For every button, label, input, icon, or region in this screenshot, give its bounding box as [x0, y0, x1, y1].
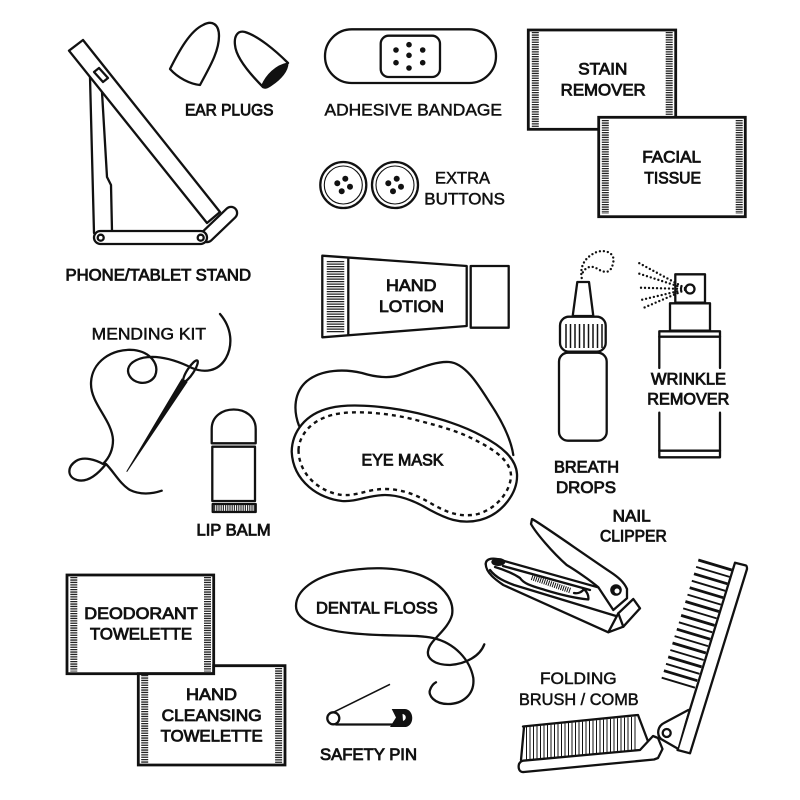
label: breath drops: BREATH	[554, 458, 619, 476]
icon: comb half	[519, 715, 662, 772]
icon: lip balm tube	[212, 410, 256, 512]
label: wrinkle remover: WRINKLE	[651, 370, 726, 388]
item: safety pin	[320, 684, 417, 764]
label: stain remover: STAIN	[578, 60, 627, 78]
icon: ear plug left	[170, 23, 219, 85]
label: nail clipper: CLIPPER	[600, 528, 667, 546]
label: breath drops: DROPS	[556, 479, 616, 497]
label: folding brush/comb: FOLDING	[540, 670, 617, 688]
icon: mask stitching	[298, 412, 511, 515]
icon: clipper	[486, 519, 640, 632]
label: facial tissue	[642, 149, 701, 187]
icon: brush half	[662, 560, 747, 753]
label: folding brush/comb: BRUSH / COMB	[519, 691, 639, 709]
label: deodorant towelette	[84, 605, 198, 644]
label: breath drops	[554, 458, 619, 497]
icon: bandage	[325, 29, 496, 83]
label: deodorant towelette: TOWELETTE	[90, 626, 192, 644]
label: extra buttons: BUTTONS	[424, 190, 505, 208]
item: stain remover packet	[528, 30, 676, 129]
item: mending kit	[69, 314, 230, 493]
icon: mask strap	[295, 362, 513, 455]
item: wrinkle remover	[638, 263, 729, 457]
item: phone/tablet stand	[66, 40, 251, 284]
label: ear plugs: EAR PLUGS	[185, 102, 274, 120]
icon: stand	[69, 40, 231, 244]
label: folding brush/comb	[519, 670, 639, 709]
label: wrinkle remover: REMOVER	[647, 390, 729, 408]
icon: hinge	[658, 710, 688, 748]
label: mending kit: MENDING KIT	[92, 325, 206, 343]
label: extra buttons	[424, 169, 505, 208]
item: deodorant towelette packet	[67, 575, 214, 674]
label: stain remover	[561, 60, 646, 99]
label: facial tissue: FACIAL	[642, 149, 701, 167]
label: deodorant towelette: DEODORANT	[84, 605, 198, 623]
item: folding brush/comb	[519, 560, 747, 772]
label: hand cleansing towelette: CLEANSING	[162, 707, 262, 725]
item: hand lotion	[322, 256, 509, 337]
label: lip balm: LIP BALM	[196, 522, 271, 540]
label: hand cleansing towelette	[161, 686, 263, 746]
item: extra buttons	[320, 162, 505, 208]
item: ear plugs	[170, 23, 288, 120]
icon: dropper bottle	[559, 251, 614, 441]
icon: tube	[322, 256, 509, 337]
label: stain remover: REMOVER	[561, 81, 646, 99]
label: hand lotion: LOTION	[379, 298, 444, 316]
label: eye mask: EYE MASK	[362, 452, 444, 470]
icon: ear plug right	[235, 32, 288, 88]
label: facial tissue: TISSUE	[644, 169, 701, 187]
label: safety pin: SAFETY PIN	[320, 746, 417, 764]
item: eye mask	[292, 362, 517, 522]
icon: button one	[320, 162, 366, 208]
icon: spray bottle	[638, 263, 720, 457]
icon: button two	[372, 162, 418, 208]
item: facial tissue packet	[599, 117, 745, 217]
label: hand lotion	[379, 277, 444, 316]
item: adhesive bandage	[324, 29, 502, 119]
label: hand cleansing towelette: TOWELETTE	[161, 728, 263, 746]
label: dental floss: DENTAL FLOSS	[316, 599, 438, 617]
label: hand cleansing towelette: HAND	[186, 686, 237, 704]
label: hand lotion: HAND	[386, 277, 437, 295]
item: lip balm	[196, 410, 271, 540]
label: nail clipper: NAIL	[613, 508, 651, 526]
item: nail clipper	[486, 508, 667, 632]
icon: pin	[327, 684, 412, 727]
item: breath drops	[554, 251, 619, 497]
item: dental floss	[296, 568, 484, 704]
label: phone/tablet stand: PHONE/TABLET STAND	[66, 266, 251, 284]
label: nail clipper	[600, 508, 667, 546]
label: adhesive bandage: ADHESIVE BANDAGE	[324, 101, 502, 119]
item: hand cleansing towelette packet	[138, 666, 285, 765]
icon: mask	[292, 405, 517, 522]
label: extra buttons: EXTRA	[435, 169, 490, 187]
icon: floss thread	[296, 568, 484, 704]
label: wrinkle remover	[647, 370, 729, 408]
icon: needle and thread	[69, 314, 230, 493]
